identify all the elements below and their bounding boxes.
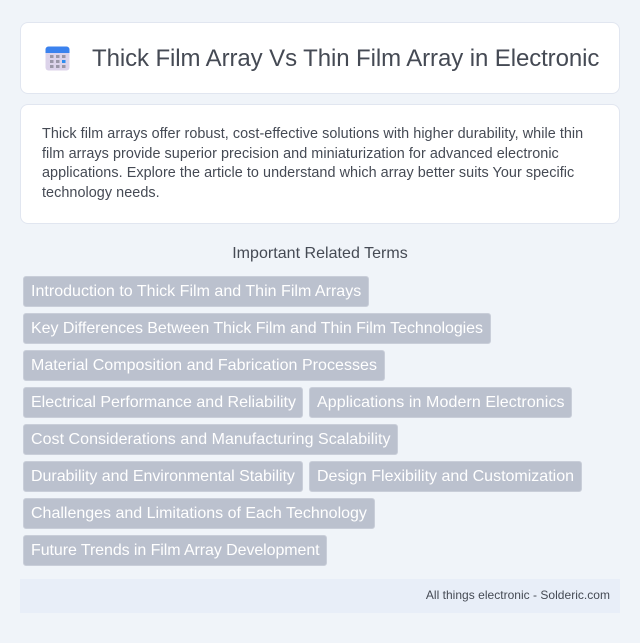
chip: Cost Considerations and Manufacturing Scalability [31,431,390,448]
icon: calendar [46,46,70,70]
intro paragraph: Thick film arrays offer robust, cost-effective solutions with higher durability, while thin [42,126,583,142]
chip: Introduction to Thick Film and Thin Film Arrays [31,283,361,300]
chip: Challenges and Limitations of Each Technology [31,505,367,522]
chip [309,387,572,418]
chip: Applications in Modern Electronics [317,394,565,411]
chip [23,276,369,307]
intro paragraph: film arrays provide superior precision and miniaturization for advanced electronic [42,146,559,162]
header panel [20,22,620,94]
chip [23,313,491,344]
chip: Key Differences Between Thick Film and Thin Film Technologies [31,320,483,337]
intro text panel [20,104,620,224]
intro paragraph: technology needs. [42,184,160,200]
chip [23,461,303,492]
chip: Future Trends in Film Array Development [31,542,320,559]
chip [23,387,303,418]
intro paragraph [42,126,583,200]
section heading: Important Related Terms [232,245,408,262]
intro paragraph: applications. Explore the article to understand which array better suits Your specific [42,165,574,181]
chip [23,424,398,455]
chip: Electrical Performance and Reliability [31,394,296,411]
chip [23,535,327,566]
chip [309,461,582,492]
title: Thick Film Array Vs Thin Film Array in Electronic [92,45,599,72]
footer credit: All things electronic - Solderic.com [426,588,610,602]
chip [23,350,385,381]
footer bar [20,579,620,613]
chip: Design Flexibility and Customization [317,468,574,485]
chip: Material Composition and Fabrication Processes [31,357,377,374]
chip: Durability and Environmental Stability [31,468,295,485]
chip [23,498,375,529]
